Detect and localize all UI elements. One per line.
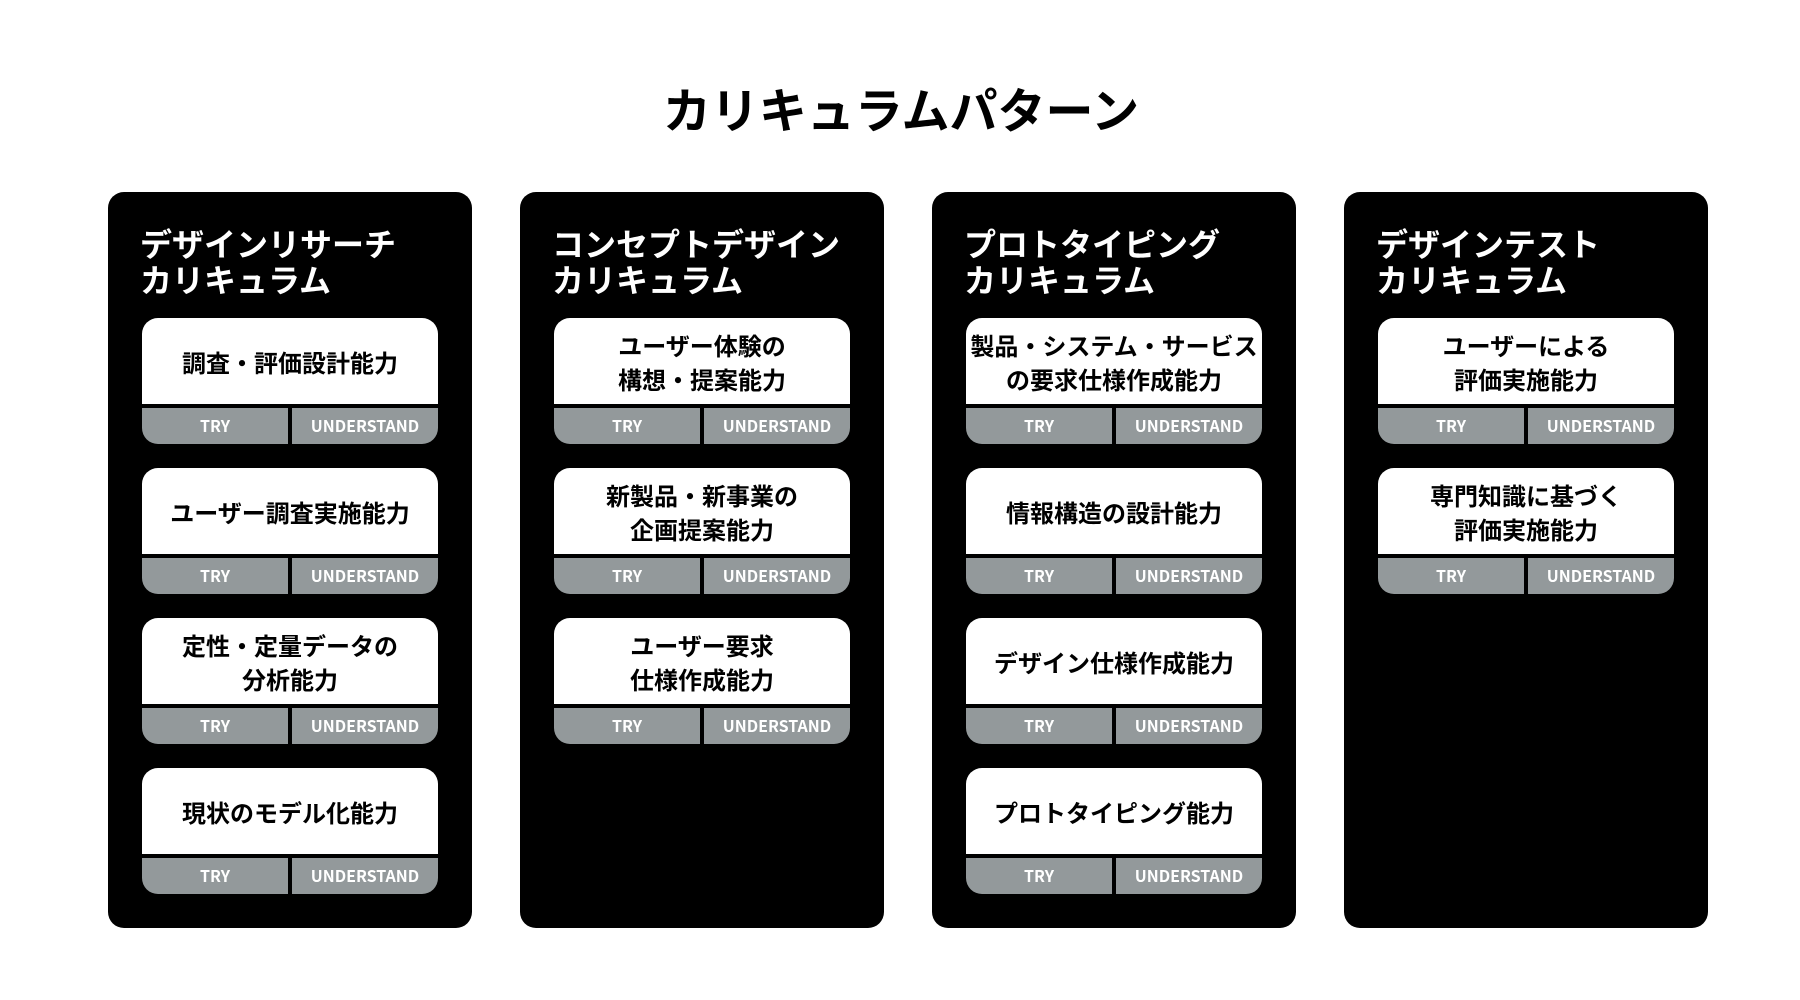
try tag: TRY: [612, 413, 642, 437]
understand tag: [1528, 558, 1674, 594]
skill label: 現状のモデル化能力: [182, 794, 398, 829]
skill label: [554, 468, 850, 554]
try tag: TRY: [1024, 863, 1054, 887]
try tag: TRY: [612, 563, 642, 587]
skill label: [554, 618, 850, 704]
panel heading: design test: カリキュラム: [1376, 256, 1567, 302]
try tag: [142, 708, 288, 744]
skill label: 仕様作成能力: [630, 661, 774, 696]
understand tag: UNDERSTAND: [1547, 563, 1655, 587]
panel heading: design research: デザインリサーチ: [140, 220, 396, 266]
understand tag: [704, 708, 850, 744]
card: user experience concept: [554, 318, 850, 444]
try tag: [142, 408, 288, 444]
understand tag: UNDERSTAND: [1135, 413, 1243, 437]
understand tag: UNDERSTAND: [723, 413, 831, 437]
skill label: [966, 318, 1262, 404]
understand tag: UNDERSTAND: [311, 863, 419, 887]
understand tag: UNDERSTAND: [311, 713, 419, 737]
understand tag: UNDERSTAND: [723, 563, 831, 587]
card: prototyping: [966, 768, 1262, 894]
try tag: [966, 558, 1112, 594]
understand tag: UNDERSTAND: [1135, 713, 1243, 737]
panel heading: design research: [140, 220, 396, 302]
skill label: [142, 618, 438, 704]
skill label: の要求仕様作成能力: [1006, 361, 1222, 396]
panel heading: design research: カリキュラム: [140, 256, 331, 302]
try tag: [966, 708, 1112, 744]
try tag: TRY: [1436, 413, 1466, 437]
skill label: [554, 318, 850, 404]
skill label: ユーザーによる: [1443, 327, 1609, 362]
skill label: [966, 468, 1262, 554]
skill label: 企画提案能力: [630, 511, 774, 546]
panel: design test curriculum: [1344, 192, 1708, 928]
try tag: TRY: [612, 713, 642, 737]
panel heading: concept design: カリキュラム: [552, 256, 743, 302]
skill label: [1378, 468, 1674, 554]
skill label: 専門知識に基づく: [1430, 477, 1622, 512]
understand tag: UNDERSTAND: [311, 563, 419, 587]
panel: concept design curriculum: [520, 192, 884, 928]
try tag: TRY: [200, 413, 230, 437]
skill label: [142, 768, 438, 854]
try tag: [966, 858, 1112, 894]
understand tag: [292, 708, 438, 744]
card: user evaluation: [1378, 318, 1674, 444]
try tag: [142, 858, 288, 894]
skill label: 情報構造の設計能力: [1006, 494, 1222, 529]
skill label: 定性・定量データの: [182, 627, 398, 662]
card: expert evaluation: [1378, 468, 1674, 594]
panel heading: concept design: [552, 220, 840, 302]
try tag: TRY: [200, 563, 230, 587]
try tag: TRY: [200, 863, 230, 887]
try tag: [1378, 408, 1524, 444]
skill label: ユーザー調査実施能力: [170, 494, 410, 529]
skill label: プロトタイピング能力: [994, 794, 1234, 829]
skill label: 評価実施能力: [1454, 361, 1598, 396]
panel heading: design test: デザインテスト: [1376, 220, 1600, 266]
card: product requirements: [966, 318, 1262, 444]
try tag: TRY: [1024, 413, 1054, 437]
panel: design research curriculum: [108, 192, 472, 928]
card: new product planning: [554, 468, 850, 594]
panel heading: concept design: コンセプトデザイン: [552, 220, 840, 266]
skill label: [966, 618, 1262, 704]
try tag: [554, 408, 700, 444]
try tag: TRY: [1024, 713, 1054, 737]
understand tag: [292, 858, 438, 894]
understand tag: [292, 558, 438, 594]
understand tag: UNDERSTAND: [723, 713, 831, 737]
understand tag: [1116, 858, 1262, 894]
skill label: [966, 768, 1262, 854]
try tag: TRY: [1436, 563, 1466, 587]
understand tag: UNDERSTAND: [1547, 413, 1655, 437]
skill label: 評価実施能力: [1454, 511, 1598, 546]
try tag: [142, 558, 288, 594]
understand tag: UNDERSTAND: [311, 413, 419, 437]
skill label: [142, 318, 438, 404]
panel: prototyping curriculum: [932, 192, 1296, 928]
understand tag: [1116, 408, 1262, 444]
skill label: [142, 468, 438, 554]
skill label: 構想・提案能力: [618, 361, 786, 396]
try tag: [554, 708, 700, 744]
understand tag: [1528, 408, 1674, 444]
card: research and evaluation design: [142, 318, 438, 444]
understand tag: [1116, 558, 1262, 594]
understand tag: [292, 408, 438, 444]
skill label: デザイン仕様作成能力: [994, 644, 1234, 679]
card: user requirements: [554, 618, 850, 744]
understand tag: UNDERSTAND: [1135, 863, 1243, 887]
card: information architecture: [966, 468, 1262, 594]
skill label: 調査・評価設計能力: [182, 344, 398, 379]
card: design specification: [966, 618, 1262, 744]
skill label: 製品・システム・サービス: [970, 327, 1258, 362]
understand tag: [704, 558, 850, 594]
try tag: TRY: [1024, 563, 1054, 587]
title: カリキュラムパターン: [663, 72, 1139, 142]
skill label: ユーザー体験の: [618, 327, 786, 362]
skill label: ユーザー要求: [630, 627, 774, 662]
skill label: 分析能力: [242, 661, 338, 696]
try tag: [1378, 558, 1524, 594]
panel heading: design test: [1376, 220, 1600, 302]
panel heading: prototyping: プロトタイピング: [964, 220, 1220, 266]
panel heading: prototyping: カリキュラム: [964, 256, 1155, 302]
understand tag: [1116, 708, 1262, 744]
panel heading: prototyping: [964, 220, 1220, 302]
card: user research: [142, 468, 438, 594]
try tag: TRY: [200, 713, 230, 737]
try tag: [554, 558, 700, 594]
understand tag: [704, 408, 850, 444]
card: data analysis: [142, 618, 438, 744]
card: current state modeling: [142, 768, 438, 894]
understand tag: UNDERSTAND: [1135, 563, 1243, 587]
try tag: [966, 408, 1112, 444]
skill label: 新製品・新事業の: [606, 477, 798, 512]
skill label: [1378, 318, 1674, 404]
